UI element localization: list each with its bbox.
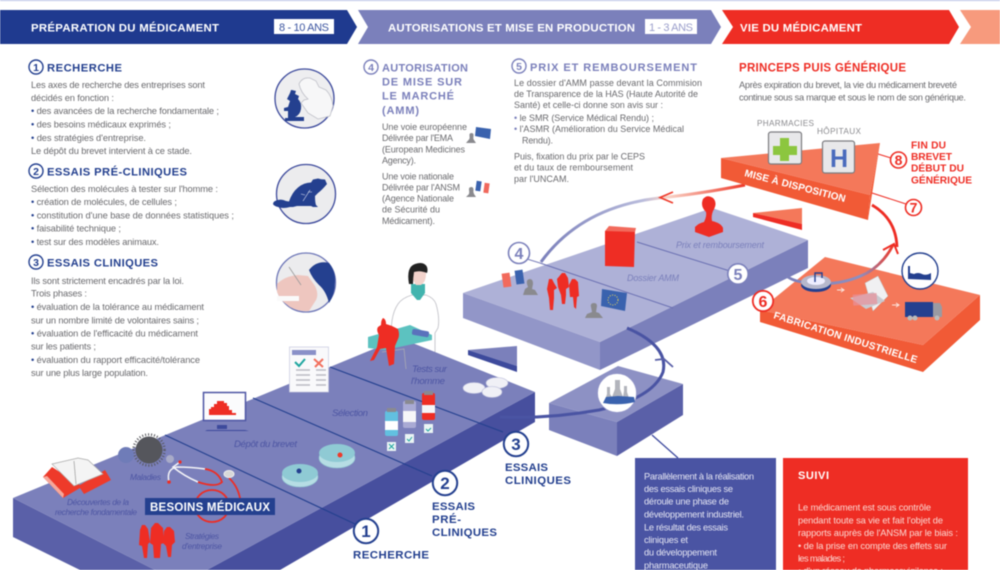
text block: autorisation de mise sur le marché: 4 xyxy=(368,62,374,74)
icon: dossier xyxy=(605,226,636,267)
text block: recherche: Les axes de recherche des entreprises sont xyxy=(31,80,205,90)
icon: doctor xyxy=(391,263,439,357)
icon: checklist xyxy=(290,347,328,392)
text block: recherche: Le dépôt du brevet intervient à ce stade. xyxy=(31,146,192,156)
icon: small red triangle xyxy=(753,208,802,230)
icon: pharmacy xyxy=(757,119,815,164)
label: prix et remboursement: Prix et remboursement xyxy=(676,240,764,250)
panel: développement industriel: développement industriel. xyxy=(644,510,744,520)
header ribbon: préparation du médicament: 8 - 10 ANS xyxy=(279,22,329,34)
step marker: 2 essais pré-cliniques: 2 xyxy=(440,474,450,493)
text block: autorisation de mise sur le marché: AUTORISATION xyxy=(382,62,468,74)
icon: flasks badge xyxy=(598,374,636,412)
icon: business people xyxy=(139,523,175,558)
text block: essais cliniques: Ils sont strictement encadrés par la loi. xyxy=(31,276,184,286)
label: dossier AMM: Dossier AMM xyxy=(627,273,680,283)
text block: princeps puis générique: PRINCEPS PUIS GÉNÉRIQUE xyxy=(739,62,906,74)
step marker: 4 xyxy=(508,242,540,264)
text block: princeps puis générique: Après expiration du brevet, la vie du médicament breveté xyxy=(739,80,957,90)
text block: autorisation de mise sur le marché: Une voie nationale xyxy=(382,172,454,182)
text block: recherche: • des besoins médicaux exprimés ; xyxy=(31,120,171,130)
panel: développement industriel: du développement xyxy=(644,548,717,558)
step marker: 6 xyxy=(753,291,773,311)
panel: suivi: Le médicament est sous contrôle xyxy=(798,502,931,512)
callout: fin du brevet: GÉNÉRIQUE xyxy=(911,174,972,186)
text block: essais cliniques: • évaluation de l'efficacité du médicament xyxy=(31,328,198,338)
text block: recherche: • des stratégies d'entreprise. xyxy=(31,133,146,143)
label: maladies: Maladies xyxy=(130,472,161,482)
label: sélection: Sélection xyxy=(332,408,368,419)
callout: fin du brevet: DÉBUT DU xyxy=(911,162,964,174)
text block: autorisation de mise sur le marché: (AMM) xyxy=(382,105,419,117)
panel: suivi: SUIVI xyxy=(798,470,829,482)
header ribbon: autorisations et mise en production xyxy=(358,10,721,44)
text block: prix et remboursement: Puis, fixation du prix par le CEPS xyxy=(514,152,645,162)
icon: group of people xyxy=(547,273,579,310)
text block: prix et remboursement: par l'UNCAM. xyxy=(514,174,569,184)
icon: pills xyxy=(463,378,508,398)
text block: autorisation de mise sur le marché: Une voie européenne xyxy=(382,122,467,132)
label: tests sur: Tests sur xyxy=(412,364,448,375)
text block: essais cliniques: sur un nombre limité de volontaires sains ; xyxy=(31,316,199,326)
step marker: 1 recherche: 1 xyxy=(361,522,371,541)
label: l'homme: l'homme xyxy=(411,376,445,387)
text block: prix et remboursement: • le SMR (Service Médical Rendu) ; xyxy=(514,113,654,123)
step marker: 1 recherche xyxy=(353,519,429,562)
text block: recherche: décidés en fonction : xyxy=(31,93,114,103)
text block: autorisation de mise sur le marché: Délivrée par l'EMA xyxy=(382,133,453,143)
text block: prix et remboursement: 5 xyxy=(516,61,522,73)
text block: autorisation de mise sur le marché xyxy=(364,60,468,226)
icon: open book xyxy=(43,458,111,498)
icon: flag and stamp Europe xyxy=(585,289,627,318)
text block: autorisation de mise sur le marché: DE MISE SUR xyxy=(382,76,462,88)
label: recherche fondamentale: recherche fondamentale xyxy=(55,507,137,517)
header ribbon: préparation du médicament xyxy=(0,10,357,44)
text block: prix et remboursement xyxy=(512,59,702,184)
label: fabrication industrielle: FABRICATION INDUSTRIELLE xyxy=(772,310,919,366)
text block: prix et remboursement: • l'ASMR (Amélioration du Service Médical xyxy=(514,124,684,134)
arrow: curve from red triangle to autorisation xyxy=(541,185,745,262)
header ribbon: autorisations et mise en production: AUTORISATIONS ET MISE EN PRODUCTION xyxy=(388,22,635,34)
text block: essais pré-cliniques: • création de molécules, de cellules ; xyxy=(31,197,177,207)
label: découvertes: Découvertes de la xyxy=(67,497,129,507)
icon: virus xyxy=(118,434,164,466)
text block: autorisation de mise sur le marché: (European Medicines xyxy=(382,144,466,154)
text block: autorisation de mise sur le marché: de Sécurité du xyxy=(382,204,440,214)
arrow: blue curve xyxy=(500,328,673,417)
icon: production disc xyxy=(801,273,831,292)
text block: essais cliniques xyxy=(29,255,204,378)
icon: stethoscope xyxy=(166,455,241,522)
text block: essais cliniques: sur une plus large population. xyxy=(31,368,148,378)
text block: essais cliniques: ESSAIS CLINIQUES xyxy=(47,258,159,270)
header ribbon: end segment xyxy=(960,10,1000,44)
panel: suivi xyxy=(783,458,968,570)
step marker: 3 essais cliniques: ESSAIS xyxy=(505,462,548,474)
label: dépôt du brevet: Dépôt du brevet xyxy=(234,439,297,450)
icon: rat xyxy=(273,164,336,224)
step marker: 7 xyxy=(872,193,922,216)
panel: suivi: pendant toute sa vie et fait l'objet de xyxy=(798,516,943,526)
text block: autorisation de mise sur le marché: Agency). xyxy=(382,156,416,166)
text block: essais pré-cliniques: 2 xyxy=(33,166,39,178)
text block: princeps puis générique xyxy=(739,62,966,102)
icon: monitor chart xyxy=(204,392,249,431)
text block: essais cliniques: • évaluation du rapport efficacité/tolérance xyxy=(31,355,200,365)
icon: hospital: H xyxy=(830,145,848,173)
text block: autorisation de mise sur le marché: LE MARCHÉ xyxy=(382,90,454,102)
callout connector xyxy=(652,435,678,458)
text block: prix et remboursement: Santé) et celle-ci donne son avis sur : xyxy=(514,100,663,110)
text block: essais pré-cliniques: • test sur des modèles animaux. xyxy=(31,237,159,247)
icon: red stamp xyxy=(695,196,723,237)
text block: essais pré-cliniques: ESSAIS PRÉ-CLINIQUES xyxy=(47,166,188,178)
icon: vials xyxy=(385,391,435,451)
panel: développement industriel xyxy=(635,458,776,570)
step marker: 2 essais pré-cliniques: ESSAIS xyxy=(432,501,475,513)
icon: EU stamp xyxy=(466,127,491,143)
text block: essais pré-cliniques: • constitution d'une base de données statistiques ; xyxy=(31,210,234,220)
label: besoins médicaux: BESOINS MÉDICAUX xyxy=(150,501,270,514)
header ribbon: autorisations et mise en production: 1 - 3 ANS xyxy=(649,22,693,34)
icon: patient on table xyxy=(368,318,432,369)
icon: microscope researcher xyxy=(275,69,334,128)
header ribbon: préparation du médicament: PRÉPARATION DU MÉDICAMENT xyxy=(31,22,219,34)
platform: fabrication industrielle xyxy=(760,257,980,372)
panel: suivi: rapports auprès de l'ANSM par le biais : xyxy=(798,528,958,538)
header ribbon: vie du médicament xyxy=(722,10,959,44)
icon: France stamp xyxy=(466,181,490,197)
label: mise à disposition: MISE À DISPOSITION xyxy=(743,166,847,205)
label: stratégies: Stratégies xyxy=(185,531,219,541)
small platform: développement industriel xyxy=(549,366,683,456)
icon: flag and stamp France xyxy=(502,270,538,295)
step marker: 2 essais pré-cliniques xyxy=(432,471,497,539)
callout: fin du brevet: FIN DU xyxy=(911,140,946,152)
text block: essais pré-cliniques xyxy=(29,164,234,247)
panel: développement industriel: Parallèlement à la réalisation xyxy=(644,472,754,482)
step marker: 3 essais cliniques: 3 xyxy=(511,435,521,454)
icon: hospital xyxy=(817,126,862,173)
panel: développement industriel: déroule une phase de xyxy=(644,496,729,506)
step marker: 2 essais pré-cliniques: CLINIQUES xyxy=(432,527,497,539)
icon: injection xyxy=(276,253,336,312)
callout: fin du brevet: BREVET xyxy=(911,152,953,163)
icon: hospital: HÔPITAUX xyxy=(817,126,862,136)
icon: truck xyxy=(905,302,942,320)
platform: autorisations xyxy=(463,208,808,370)
label: d'entreprise: d'entreprise xyxy=(182,541,222,551)
text block: recherche xyxy=(29,60,219,156)
panel: développement industriel: des essais cliniques se xyxy=(644,484,733,494)
panel: suivi: les malades ; xyxy=(798,554,845,564)
step marker: 7: 7 xyxy=(910,200,918,216)
step marker: 3 essais cliniques xyxy=(504,432,571,487)
callout: fin du brevet xyxy=(878,140,972,186)
label: besoins médicaux xyxy=(145,498,275,515)
callout: fin du brevet: 8 xyxy=(895,152,903,168)
text block: essais cliniques: • évaluation de la tolérance au médicament xyxy=(31,302,204,312)
main platform: preparation xyxy=(13,338,535,570)
text block: autorisation de mise sur le marché: Médicament). xyxy=(382,216,435,226)
icon: factory badge xyxy=(902,253,938,289)
text block: recherche: RECHERCHE xyxy=(47,62,123,74)
step marker: 5: 5 xyxy=(734,267,743,284)
text block: prix et remboursement: PRIX ET REMBOURSEMENT xyxy=(530,62,697,74)
step marker: 2 essais pré-cliniques: PRÉ- xyxy=(432,513,461,526)
platform: mise à disposition xyxy=(721,143,880,220)
header ribbon: vie du médicament: VIE DU MÉDICAMENT xyxy=(740,22,862,34)
icon: petri dishes xyxy=(282,444,355,487)
text block: autorisation de mise sur le marché: Délivrée par l'ANSM xyxy=(382,182,460,192)
step marker: 4: 4 xyxy=(515,246,524,263)
text block: essais cliniques: 3 xyxy=(33,257,39,269)
step marker: 3 essais cliniques: CLINIQUES xyxy=(505,475,571,487)
icon: pharmacy: PHARMACIES xyxy=(757,119,815,128)
step marker: 5 xyxy=(728,264,748,284)
text block: prix et remboursement: de Transparence de la HAS (Haute Autorité de xyxy=(514,89,698,99)
text block: prix et remboursement: Rendu). xyxy=(522,136,553,146)
icon: indigo triangle xyxy=(468,346,517,372)
panel: développement industriel: cliniques et xyxy=(644,535,688,545)
arrow: red return curve xyxy=(783,205,898,284)
text block: essais cliniques: sur les patients ; xyxy=(31,342,96,352)
text block: prix et remboursement: Le dossier d'AMM passe devant la Commision xyxy=(514,78,702,88)
step marker: 1 recherche: RECHERCHE xyxy=(353,550,429,562)
panel: suivi: • de la prise en compte des effets sur xyxy=(798,541,947,551)
step marker: 6: 6 xyxy=(759,294,768,311)
text block: princeps puis générique: continue sous sa marque et sous le nom de son générique. xyxy=(739,92,966,102)
icon: blister packs xyxy=(850,276,888,311)
text block: recherche: • des avancées de la recherche fondamentale ; xyxy=(31,106,219,116)
text block: autorisation de mise sur le marché: (Agence Nationale xyxy=(382,194,454,204)
small arrows between production icons xyxy=(837,288,899,307)
text block: prix et remboursement: et du taux de remboursement xyxy=(514,162,633,172)
panel: développement industriel: Le résultat des essais xyxy=(644,522,728,532)
text block: essais pré-cliniques: • faisabilité technique ; xyxy=(31,224,121,234)
text block: essais pré-cliniques: Sélection des molécules à tester sur l'homme : xyxy=(31,184,218,194)
text block: recherche: 1 xyxy=(33,62,39,74)
text block: essais cliniques: Trois phases : xyxy=(31,288,87,298)
